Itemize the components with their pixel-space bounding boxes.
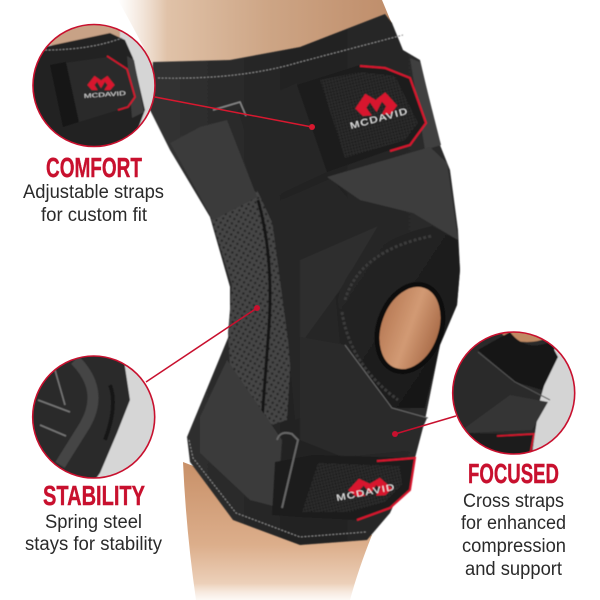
upper tab dotted face: [320, 72, 418, 158]
patella buttress: [338, 226, 460, 408]
top cuff stitching: [158, 35, 403, 78]
mesh side stay: [210, 190, 292, 428]
bottom cuff stitching: [189, 440, 366, 537]
lower cross strap: [300, 337, 427, 457]
lower logo tab: [272, 455, 415, 520]
text: comfort line 1: Adjustable straps: [23, 182, 164, 203]
upper tab wordmark: MCDAVID: [349, 106, 409, 131]
upper tab red trim: [360, 66, 426, 151]
detail circle: comfort: MCDAVID: [84, 91, 127, 100]
text: stability line 2: stays for stability: [25, 534, 162, 555]
diagonal strap: [300, 226, 378, 345]
thigh skin: [118, 0, 392, 66]
brace body: [150, 14, 460, 545]
upper velcro patch: [170, 120, 257, 220]
upper ring buckle: [213, 102, 246, 116]
patella opening: [365, 275, 455, 381]
dark spine channel: [258, 200, 270, 420]
lower tab red trim: [357, 458, 415, 520]
text: focused line 1: Cross straps: [463, 491, 564, 512]
detail circle: stability: [30, 355, 160, 485]
text: focused line 2: for enhanced: [461, 513, 566, 534]
upper cross strap: [327, 147, 458, 240]
central side panel: [270, 178, 372, 420]
heading: stability: STABILITY: [43, 480, 145, 511]
lower tab logo: [347, 477, 393, 497]
callout line: stability: [146, 305, 260, 382]
detail circle: comfort: [30, 20, 160, 150]
patella buttress stitch: [342, 236, 432, 400]
lower strap edge: [345, 345, 428, 418]
knee brace: [150, 14, 460, 545]
lower ring buckle: [277, 433, 298, 508]
heading: comfort: COMFORT: [46, 152, 142, 183]
upper strap band: [238, 83, 327, 200]
top right velcro: [410, 58, 441, 150]
callout line: comfort: [155, 97, 315, 130]
upper tab logo: [354, 92, 398, 116]
lower tab wordmark: MCDAVID: [335, 482, 396, 503]
text: focused line 4: and support: [465, 559, 563, 580]
callout line: focused: [392, 416, 456, 437]
text: focused line 3: compression: [462, 536, 566, 557]
lower velcro patch: [200, 360, 282, 507]
lower tab dotted face: [302, 463, 402, 512]
detail circle: focused: [452, 331, 576, 455]
text: stability line 1: Spring steel: [45, 512, 142, 533]
upper logo tab: [297, 65, 426, 172]
text: comfort line 2: for custom fit: [41, 205, 148, 226]
lower leg skin: [183, 462, 372, 600]
